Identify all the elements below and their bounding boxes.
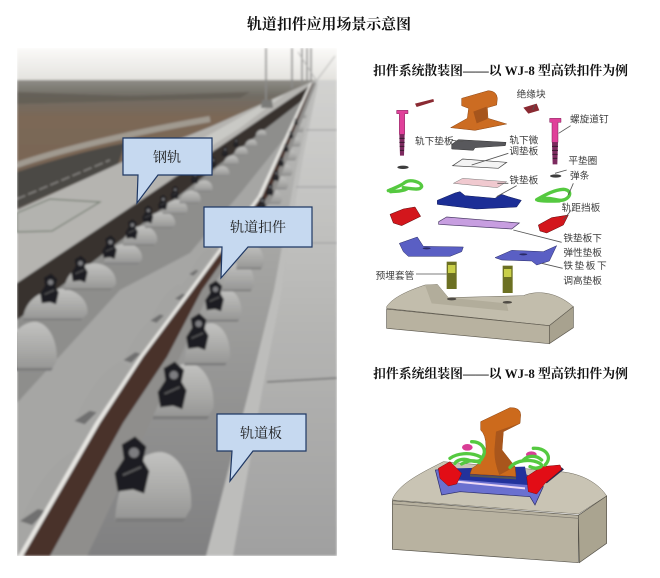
height adjustment plates bbox=[399, 237, 557, 265]
callout: 轨道板: 轨道板 bbox=[240, 425, 282, 442]
callout: 钢轨 bbox=[123, 138, 212, 203]
leader lines bbox=[416, 104, 573, 274]
part labels: 弹性垫板 bbox=[563, 247, 602, 259]
screw spikes bbox=[397, 110, 561, 178]
part labels: 绝缘块 bbox=[517, 89, 546, 101]
part labels: 弹条 bbox=[570, 170, 590, 182]
part labels bbox=[376, 89, 609, 287]
right rail humps bbox=[115, 452, 191, 522]
diagram: exploded fastening system bbox=[376, 89, 609, 344]
gauge blocks bbox=[438, 462, 562, 494]
rail bbox=[451, 91, 507, 130]
heading: exploded view: 扣件系统散装图——以 WJ-8 型高铁扣件为例 bbox=[373, 63, 628, 78]
part labels: 轨距挡板 bbox=[562, 202, 601, 214]
base plates bbox=[435, 467, 564, 505]
iron base plate bbox=[437, 192, 521, 209]
heading: assembled view: 扣件系统组装图——以 WJ-8 型高铁扣件为例 bbox=[373, 366, 628, 381]
embedded sleeves bbox=[447, 262, 513, 293]
hatch bbox=[17, 199, 100, 232]
part labels: 铁垫板下 bbox=[563, 233, 602, 245]
insulators bbox=[415, 99, 539, 114]
rail bbox=[470, 408, 521, 479]
spikes bbox=[462, 444, 537, 458]
title: 轨道扣件应用场景示意图 bbox=[247, 15, 411, 33]
part labels: 铁垫板 bbox=[509, 174, 539, 186]
part labels: 预埋套管 bbox=[376, 270, 415, 282]
pads bbox=[452, 140, 507, 188]
part labels: 铁垫板下 bbox=[563, 260, 607, 272]
right rail bbox=[154, 82, 316, 412]
part labels: 调垫板 bbox=[509, 145, 539, 157]
poles bbox=[266, 48, 311, 103]
left rail humps bbox=[23, 289, 87, 320]
callout: 轨道扣件: 轨道扣件 bbox=[230, 219, 286, 236]
part labels: 平垫圈 bbox=[568, 155, 597, 167]
photo: high-speed rail track bbox=[3, 48, 337, 556]
gauge blocks bbox=[390, 207, 568, 233]
spring clips bbox=[388, 181, 570, 201]
part labels: 调高垫板 bbox=[563, 275, 602, 287]
callout: 轨道板 bbox=[217, 414, 306, 481]
part labels: 轨下微 bbox=[509, 134, 539, 146]
callout: 钢轨: 钢轨 bbox=[153, 149, 181, 166]
sleeper block bbox=[392, 462, 607, 563]
part labels: 轨下垫板 bbox=[415, 135, 454, 147]
spring clips bbox=[450, 442, 548, 468]
part labels: 螺旋道钉 bbox=[570, 113, 609, 125]
sleeper block bbox=[387, 284, 573, 344]
callout: 轨道扣件 bbox=[204, 207, 312, 278]
elastic pad bbox=[439, 217, 519, 229]
diagram: assembled fastening system bbox=[392, 408, 607, 563]
